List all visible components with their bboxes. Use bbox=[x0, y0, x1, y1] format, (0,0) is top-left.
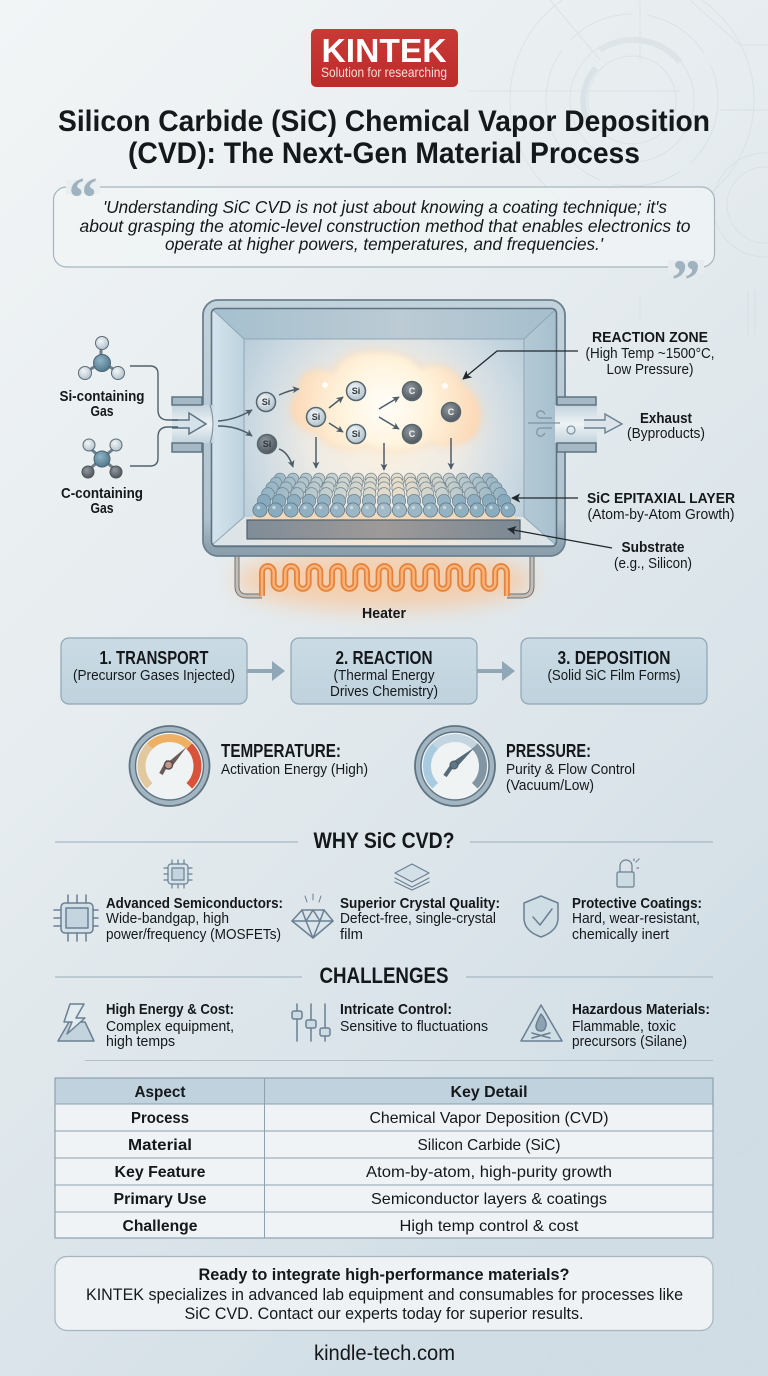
label: SiC epitaxial layer: (Atom-by-Atom Growth) bbox=[588, 506, 735, 523]
item: protective coatings bbox=[524, 895, 702, 943]
table row: material bbox=[128, 1137, 560, 1154]
title: Silicon Carbide (SiC) Chemical Vapor Deposition bbox=[58, 105, 710, 138]
label: exhaust: (Byproducts) bbox=[627, 425, 705, 442]
quote callout: about grasping the atomic-level construction method that enables electronics to bbox=[80, 216, 691, 236]
temperature text bbox=[221, 741, 368, 778]
reaction cloud bbox=[291, 353, 480, 450]
label: reaction zone: REACTION ZONE bbox=[592, 329, 708, 346]
item: advanced semiconductors bbox=[54, 895, 283, 943]
step 3: deposition bbox=[521, 638, 707, 704]
quote callout bbox=[54, 165, 714, 313]
substrate bbox=[247, 511, 520, 539]
item: advanced semiconductors: power/frequency (MOSFETs) bbox=[106, 926, 281, 943]
arrow: step 1 to 2 bbox=[247, 661, 285, 681]
quote callout: ” bbox=[672, 248, 700, 313]
label: Si-containing gas: Si-containing bbox=[60, 388, 144, 405]
table row: process bbox=[131, 1110, 608, 1127]
heater: Heater bbox=[362, 605, 406, 622]
label: reaction zone: Low Pressure) bbox=[606, 361, 694, 378]
item: hazardous materials: Hazardous Materials: bbox=[572, 1001, 710, 1018]
call to action: KINTEK specializes in advanced lab equipment and consumables for processes like bbox=[86, 1285, 683, 1304]
item: superior crystal quality: film bbox=[340, 926, 363, 943]
step 2: reaction: (Thermal Energy bbox=[334, 667, 435, 684]
gas atoms bbox=[256, 382, 460, 454]
item: protective coatings: Protective Coatings: bbox=[572, 895, 702, 912]
step 2: reaction: Drives Chemistry) bbox=[330, 683, 438, 700]
item: superior crystal quality: Superior Crystal Quality: bbox=[340, 895, 500, 912]
label: Si-containing gas: Gas bbox=[90, 403, 114, 420]
gas atoms: Si bbox=[352, 429, 360, 439]
call to action bbox=[55, 1256, 713, 1330]
item: hazardous materials: Flammable, toxic bbox=[572, 1018, 676, 1035]
pressure text bbox=[506, 741, 635, 794]
item: intricate control: Intricate Control: bbox=[340, 1001, 452, 1018]
temperature gauge bbox=[130, 726, 210, 806]
table row: primary use: Semiconductor layers & coatings bbox=[371, 1191, 607, 1208]
table header: Key Detail bbox=[450, 1084, 528, 1101]
exhaust port bbox=[528, 397, 622, 452]
item: high energy and cost: Complex equipment, bbox=[106, 1018, 234, 1035]
pressure text: Purity & Flow Control bbox=[506, 761, 635, 778]
inlet port bbox=[172, 397, 214, 452]
arrow: step 2 to 3 bbox=[477, 661, 515, 681]
step 3: deposition: 3. DEPOSITION bbox=[558, 648, 670, 668]
item: high energy and cost: high temps bbox=[106, 1033, 175, 1050]
title: (CVD): The Next-Gen Material Process bbox=[128, 137, 640, 170]
label: substrate: (e.g., Silicon) bbox=[614, 555, 692, 572]
label: C-containing gas bbox=[61, 439, 143, 517]
gas atoms: Si bbox=[352, 386, 360, 396]
table row: material: Material bbox=[128, 1137, 192, 1154]
table row: challenge: High temp control & cost bbox=[400, 1218, 579, 1235]
table row: primary use bbox=[114, 1191, 607, 1208]
icon: small chip bbox=[164, 860, 192, 888]
call to action: Ready to integrate high-performance materials? bbox=[198, 1265, 570, 1284]
table row: material: Silicon Carbide (SiC) bbox=[418, 1137, 560, 1154]
SiC epitaxial atom layer bbox=[258, 479, 508, 510]
reactor diagram bbox=[172, 300, 622, 622]
table header bbox=[134, 1084, 528, 1101]
label: exhaust bbox=[627, 410, 705, 442]
reaction chamber bbox=[203, 300, 565, 556]
gas atoms: C bbox=[448, 407, 455, 417]
label: reaction zone bbox=[463, 329, 714, 379]
quote callout: 'Understanding SiC CVD is not just about knowing a coating technique; it's bbox=[103, 197, 667, 217]
icon: layers bbox=[395, 864, 429, 890]
item: hazardous materials: precursors (Silane) bbox=[572, 1033, 687, 1050]
table row: key feature: Key Feature bbox=[114, 1164, 206, 1181]
pressure gauge bbox=[415, 726, 495, 806]
label: reaction zone: (High Temp ~1500°C, bbox=[586, 345, 714, 362]
table row: challenge bbox=[122, 1218, 579, 1235]
gas atoms: C bbox=[409, 429, 416, 439]
step 3: deposition: (Solid SiC Film Forms) bbox=[548, 667, 680, 684]
label: SiC epitaxial layer: SiC EPITAXIAL LAYER bbox=[587, 490, 735, 507]
icon: lock bbox=[617, 859, 640, 887]
logo: Solution for researching bbox=[321, 64, 447, 80]
step 1: transport: 1. TRANSPORT bbox=[100, 648, 209, 668]
item: hazardous materials bbox=[521, 1001, 710, 1050]
step 2: reaction: 2. REACTION bbox=[336, 648, 432, 668]
item: high energy and cost: High Energy & Cost: bbox=[106, 1001, 234, 1018]
title bbox=[58, 105, 710, 170]
item: intricate control: Sensitive to fluctuations bbox=[340, 1018, 488, 1035]
label: SiC epitaxial layer bbox=[512, 490, 735, 523]
logo: KINTEK bbox=[322, 32, 447, 69]
table row: key feature: Atom-by-atom, high-purity growth bbox=[366, 1164, 612, 1181]
call to action: SiC CVD. Contact our experts today for superior results. bbox=[184, 1304, 584, 1323]
label: C-containing gas: Gas bbox=[90, 500, 114, 517]
pressure text: (Vacuum/Low) bbox=[506, 777, 594, 794]
item: superior crystal quality: Defect-free, single-crystal bbox=[340, 910, 496, 927]
logo bbox=[311, 29, 458, 87]
temperature text: TEMPERATURE: bbox=[221, 741, 341, 761]
item: protective coatings: Hard, wear-resistant, bbox=[572, 910, 700, 927]
quote callout: operate at higher powers, temperatures, and frequencies.' bbox=[165, 234, 604, 254]
heading: challenges: CHALLENGES bbox=[320, 963, 448, 988]
gas atoms: Si bbox=[263, 439, 271, 449]
item: intricate control bbox=[292, 1001, 488, 1041]
table row: process: Chemical Vapor Deposition (CVD) bbox=[370, 1110, 608, 1127]
table row: key feature bbox=[114, 1164, 612, 1181]
temperature text: Activation Energy (High) bbox=[221, 761, 368, 778]
step 2: reaction bbox=[291, 638, 477, 704]
table row: process: Process bbox=[131, 1110, 189, 1127]
heater bbox=[234, 550, 534, 622]
gas feed lines bbox=[130, 366, 178, 466]
item: high energy and cost bbox=[58, 1001, 234, 1050]
table row: challenge: Challenge bbox=[122, 1218, 198, 1235]
step 1: transport: (Precursor Gases Injected) bbox=[73, 667, 235, 684]
item: superior crystal quality bbox=[292, 894, 500, 943]
heading: why SiC CVD: WHY SiC CVD? bbox=[314, 828, 454, 853]
gas atoms: Si bbox=[262, 397, 270, 407]
label: C-containing gas: C-containing bbox=[61, 485, 143, 502]
summary table bbox=[55, 1078, 713, 1238]
gas atoms: Si bbox=[312, 412, 320, 422]
label: exhaust: Exhaust bbox=[640, 410, 692, 427]
label: substrate bbox=[508, 529, 692, 572]
quote callout: “ bbox=[68, 165, 98, 230]
table header: Aspect bbox=[134, 1084, 186, 1101]
website: kindle-tech.com bbox=[314, 1342, 455, 1365]
step 1: transport bbox=[61, 638, 247, 704]
gas flow arrows bbox=[218, 389, 451, 470]
item: protective coatings: chemically inert bbox=[572, 926, 670, 943]
label: substrate: Substrate bbox=[622, 539, 684, 556]
item: advanced semiconductors: Advanced Semiconductors: bbox=[106, 895, 283, 912]
gas atoms: C bbox=[409, 386, 416, 396]
pressure text: PRESSURE: bbox=[506, 741, 591, 761]
item: advanced semiconductors: Wide-bandgap, high bbox=[106, 910, 229, 927]
table row: primary use: Primary Use bbox=[114, 1191, 207, 1208]
label: Si-containing gas bbox=[60, 336, 144, 420]
